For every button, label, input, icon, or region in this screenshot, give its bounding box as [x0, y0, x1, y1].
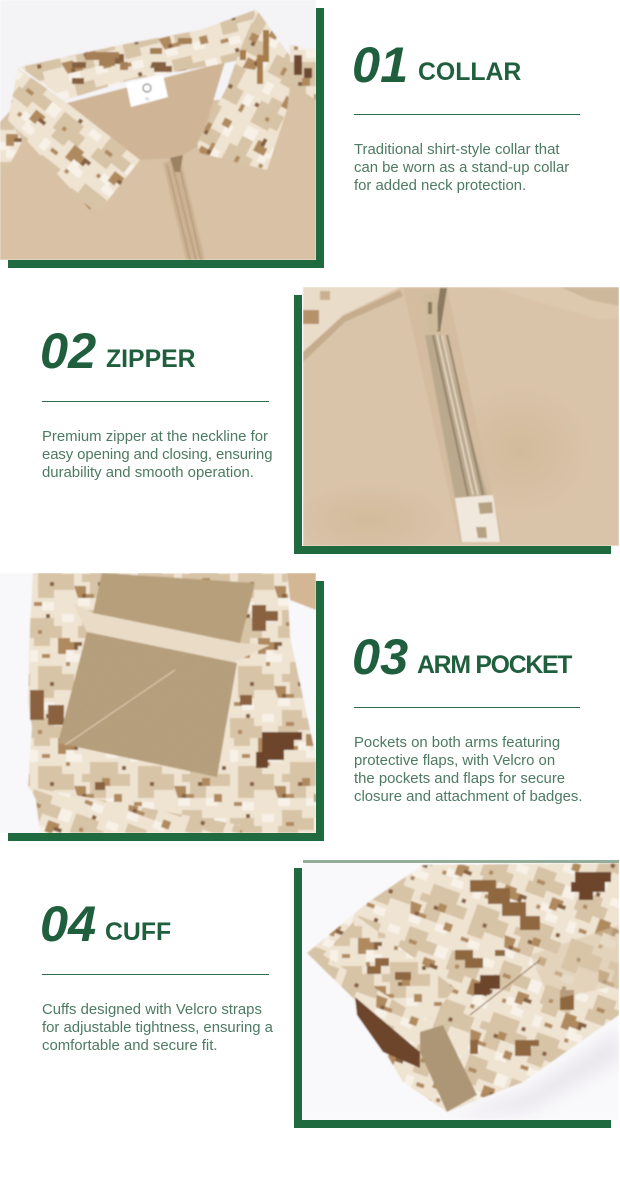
- panel: zipper: [285, 287, 619, 560]
- description: cuff: comfortable and secure fit.: [42, 1038, 217, 1054]
- description: zipper: Premium zipper at the neckline for: [42, 429, 268, 445]
- description: collar: can be worn as a stand-up collar: [354, 160, 569, 176]
- number 04: 04: [40, 895, 96, 952]
- green frame: zipper: [294, 295, 611, 554]
- text block: collar: [352, 36, 580, 194]
- description: cuff: for adjustable tightness, ensuring a: [42, 1020, 274, 1036]
- heading: COLLAR: COLLAR: [418, 59, 521, 86]
- description: zipper: durability and smooth operation.: [42, 465, 254, 481]
- description: arm pocket: Pockets on both arms featuring: [354, 735, 560, 751]
- number 02: 02: [40, 322, 96, 379]
- panel: cuff: [294, 860, 619, 1128]
- photo: cuff: [303, 863, 619, 1120]
- description: cuff: Cuffs designed with Velcro straps: [42, 1002, 262, 1018]
- green frame: collar: [8, 8, 324, 268]
- heading: CUFF: CUFF: [105, 919, 171, 946]
- description: collar: Traditional shirt-style collar that: [354, 142, 560, 158]
- heading: ARM POCKET: ARM POCKET: [417, 652, 572, 679]
- description: zipper: easy opening and closing, ensuring: [42, 447, 272, 463]
- photo: arm pocket: [0, 573, 316, 833]
- panel: arm pocket: [0, 573, 324, 841]
- panel: collar: [0, 0, 324, 268]
- description: arm pocket: closure and attachment of badges.: [354, 789, 582, 805]
- text block: cuff: [40, 895, 274, 1054]
- photo: collar: [0, 0, 316, 260]
- description: arm pocket: protective flaps, with Velcro on: [354, 753, 555, 769]
- number 01: 01: [352, 36, 408, 93]
- size tag label: XL: [145, 96, 151, 101]
- description: collar: for added neck protection.: [354, 178, 526, 194]
- green frame: arm pocket: [8, 581, 324, 841]
- heading: ZIPPER: ZIPPER: [106, 346, 196, 373]
- top accent line: [303, 860, 619, 863]
- green frame: cuff: [294, 868, 611, 1128]
- text block: arm pocket: [352, 628, 582, 805]
- description: arm pocket: the pockets and flaps for secure: [354, 771, 565, 787]
- photo: zipper: [303, 287, 619, 546]
- text block: zipper: [40, 322, 272, 481]
- number 03: 03: [352, 628, 408, 685]
